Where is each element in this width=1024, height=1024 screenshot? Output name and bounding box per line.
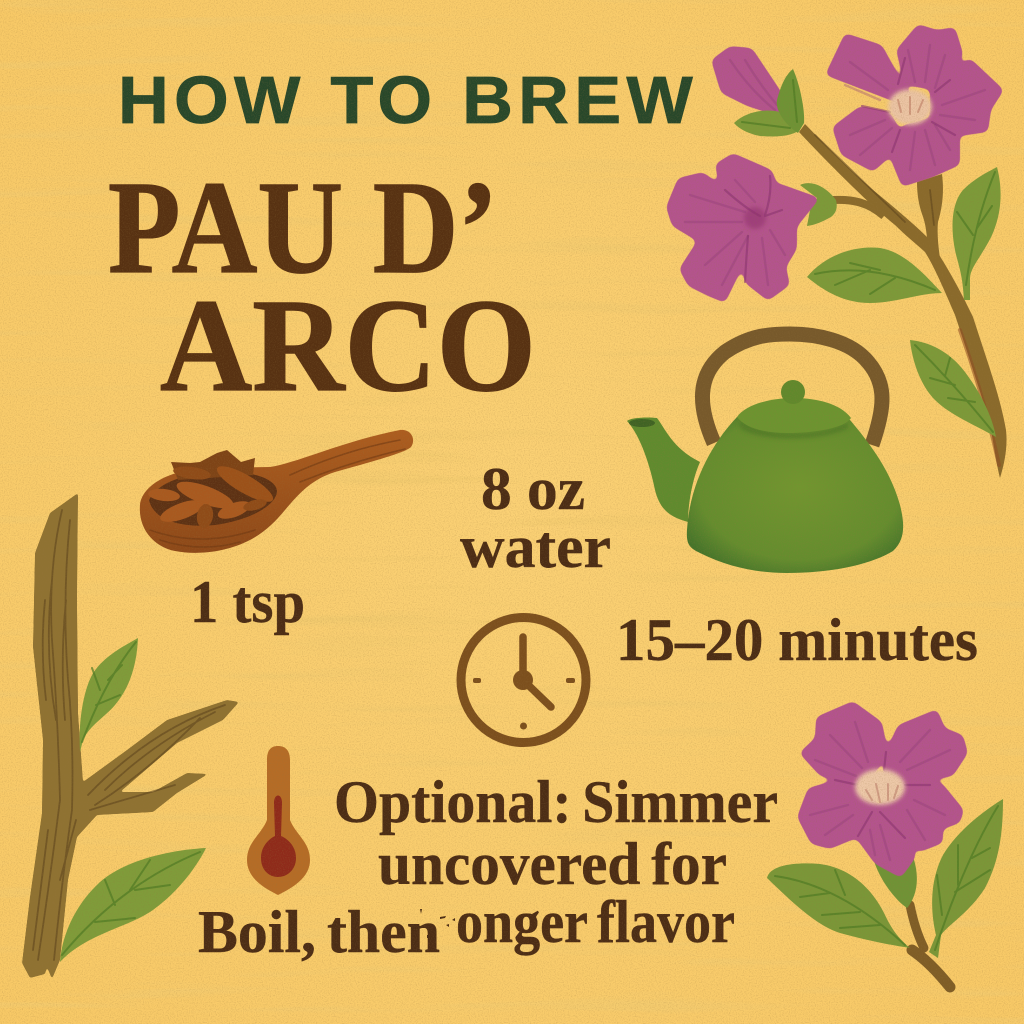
specks near broken text <box>419 909 455 938</box>
leaf: lower <box>60 848 206 962</box>
teapot handle <box>702 334 882 445</box>
flower bud <box>711 46 804 136</box>
leaf: left <box>767 863 910 948</box>
title: pau d'arco: ARCO <box>160 271 536 419</box>
flower centre <box>855 769 905 805</box>
label: 8 oz water <box>460 456 611 580</box>
flower: open upper <box>825 24 1004 187</box>
branch stems <box>799 124 1007 478</box>
illustration: wooden spoon with bark <box>140 430 413 553</box>
thermometer mercury <box>261 796 296 877</box>
leaf: upper right <box>953 167 1001 300</box>
illustration: top flowering branch <box>666 24 1007 478</box>
illustration: teapot <box>627 334 903 573</box>
flower: side view <box>666 153 837 303</box>
leaf: lower <box>910 340 996 437</box>
thermometer body <box>247 746 310 895</box>
illustration: lower right flower <box>767 701 1003 987</box>
leaf: upper <box>80 638 138 752</box>
title: pau d'arco: PAU D’ <box>108 153 498 301</box>
petal veins <box>810 722 950 860</box>
title: pau d'arco <box>108 153 536 419</box>
calyx <box>874 854 917 908</box>
stick wood <box>22 493 239 979</box>
label: 1 tsp: 1 tsp <box>190 569 305 635</box>
stick grain <box>33 510 225 960</box>
spoon wood grain <box>150 440 405 547</box>
text: optional simmer note: uncovered for <box>378 831 727 897</box>
text: optional simmer note: Boil, then <box>198 899 440 965</box>
icon: clock <box>461 618 586 742</box>
flower stem <box>910 905 924 948</box>
label: 8 oz water: 8 oz <box>481 456 585 522</box>
teapot body <box>687 417 903 573</box>
flower petals <box>797 701 968 878</box>
text: optional simmer note: Optional: Simmer <box>334 769 778 835</box>
spoon bowl <box>149 472 277 526</box>
teapot lid <box>737 380 851 438</box>
leaf: right <box>929 799 1003 958</box>
label: 15-20 minutes: 15–20 minutes <box>616 607 978 673</box>
spoon body <box>140 430 413 553</box>
petal separators <box>835 752 930 838</box>
bark pieces <box>147 450 277 529</box>
label: 8 oz water: water <box>460 514 611 580</box>
illustration: bark stick with leaves <box>22 493 239 979</box>
teapot spout <box>627 417 700 522</box>
heading: how to brew: HOW TO BREW <box>118 63 698 138</box>
leaf: middle <box>807 247 942 303</box>
icon: thermometer spoon <box>247 746 310 895</box>
text: optional simmer note: onger flavor <box>456 889 735 955</box>
text: optional simmer note <box>198 769 778 965</box>
